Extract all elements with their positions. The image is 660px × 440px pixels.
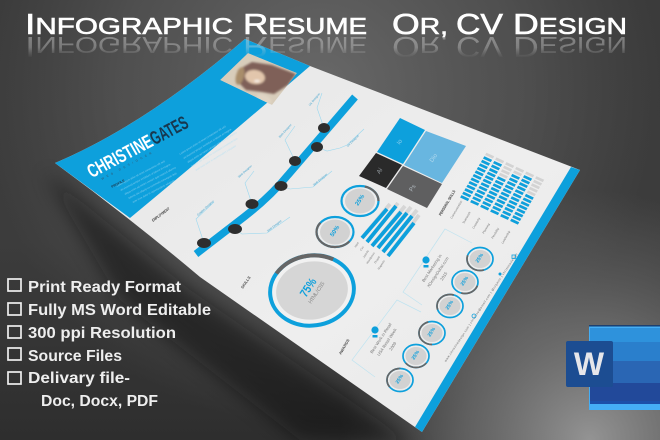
profile label: PROFILE: [111, 178, 126, 189]
profile text: left column: aute irure dolor in reprehenderit voluptate: [132, 178, 176, 204]
matrix: gray tracks: [464, 154, 540, 223]
matrix: blue levels: [464, 158, 530, 223]
badge 3: 25%: [445, 299, 455, 311]
badge 3: [437, 294, 463, 318]
profile text: left column: [116, 159, 178, 204]
item: resolution: 300 ppi Resolution: [28, 325, 176, 342]
bar labels: Css: [359, 245, 365, 252]
profile text: right column: Lorem ipsum dolor sit amet consectetur elit sed: [178, 124, 227, 156]
profile text: left column: aliqua enim ad minim veniam quis nostrud ullamco: [124, 165, 177, 196]
quadrant: blue square: [377, 118, 425, 164]
title reflection: RESUME: [243, 30, 367, 62]
ring caption: HTML / CSS: [308, 281, 327, 305]
skill ring: 25%: [342, 186, 378, 216]
name: Christine Gates: GATES: [147, 113, 192, 150]
award text: Best Marketing in: [421, 253, 443, 283]
badge 4: 25%: [427, 326, 437, 338]
item: print ready: Print Ready Format: [28, 279, 181, 296]
employment label: EMPLOYMENT: [151, 206, 171, 223]
quadrant: gray square: [387, 166, 442, 208]
icon: MS Word: [566, 325, 660, 410]
skill ring: 25%: 25%: [355, 193, 367, 207]
timeline band: [196, 97, 355, 254]
title: INFOGRAPHIC: [25, 9, 233, 41]
skill ring: 50%: 50%: [330, 224, 342, 238]
quadrant: labels: [376, 138, 440, 193]
quadrant: labels: Ps: [409, 184, 418, 193]
timeline labels: UX Designer: [308, 92, 321, 107]
timeline labels: Web Designer: [312, 172, 328, 187]
timeline labels: Web Designer: [278, 123, 293, 139]
skill ring: 75% html css: [266, 250, 358, 331]
timeline connectors: [196, 93, 364, 243]
personal skills heading: PERSONAL SKILLS: [438, 189, 456, 217]
award text: USA Retail Week: [376, 327, 398, 357]
profile text: left column: do eiusmod tempor incididunt ut labore et magna: [120, 162, 172, 192]
award box: marketing: [403, 229, 472, 305]
title: DESIGN: [513, 9, 627, 41]
matrix: row labels: Leadership: [500, 229, 511, 245]
skill ring: 50%: [316, 217, 354, 247]
bar labels: Drupal: [373, 255, 381, 264]
profile text: right column: laboris nisi aliquip ex commodo consequat duis: [190, 136, 239, 168]
badge 2: [452, 270, 478, 294]
title reflection: OR,: [392, 30, 448, 62]
bar labels: Joomla: [362, 249, 370, 259]
timeline labels: Web Designer: [266, 219, 283, 233]
award text: Best Work in Retail: [369, 322, 393, 354]
bar labels: Html: [353, 241, 360, 248]
item: formats: Doc, Docx, PDF: [41, 393, 158, 410]
resume sheet: [55, 39, 580, 432]
profile text: left column: Lorem ipsum dolor sit amet consectetur elit sed: [116, 159, 166, 188]
title: CV: [456, 9, 504, 41]
sheet: blue header: [55, 39, 310, 218]
paper shadow: [45, 172, 425, 440]
profile text: right column: do eiusmod tempor incididunt ut labore et magna: [182, 127, 232, 160]
timeline nodes: [197, 123, 330, 248]
contact line: www.christinedesign.com | christine@email.com | @organic | christinedesign: [443, 252, 519, 363]
sheet: blue right bar: [415, 167, 580, 432]
item: source files: Source Files: [28, 348, 122, 365]
title: OR,: [392, 9, 448, 41]
bar labels: Wordpress: [365, 251, 376, 265]
title reflection: CV: [456, 30, 504, 62]
profile text: right column: aliqua enim ad minim veniam quis nostrud ullamco: [186, 130, 238, 164]
matrix: row labels: Flexibility: [490, 226, 500, 240]
word W tile: W: [574, 346, 605, 382]
timeline labels: UX Designer: [346, 134, 360, 148]
badge 4: [419, 322, 445, 344]
award text: 2009: [388, 340, 398, 351]
item: word editable: Fully MS Word Editable: [28, 302, 211, 319]
timeline labels: Web Designer: [237, 164, 253, 179]
job title: WEB DESIGNER: [101, 150, 155, 181]
quadrant: labels: Io: [396, 138, 404, 146]
bar tracks: [362, 203, 419, 256]
title: RESUME: [243, 9, 367, 41]
item: delivery file: Delivary file-: [28, 370, 130, 387]
award box: retail: [352, 300, 421, 377]
award icon: [371, 326, 379, 338]
ring value: 75%: [297, 275, 320, 300]
matrix: row labels: Communication: [449, 199, 463, 220]
badge 5: 25%: [411, 349, 421, 361]
badge 5: [403, 344, 429, 368]
portrait photo: [220, 53, 297, 106]
matrix: row labels: [449, 199, 511, 245]
award badges: [387, 248, 493, 392]
badge 2: 25%: [460, 275, 470, 287]
quadrant: labels: Dio: [429, 152, 440, 164]
personal skills matrix: [438, 154, 540, 245]
bar levels: [362, 206, 414, 256]
title reflection: [25, 30, 627, 62]
checkbox icons: [8, 279, 21, 384]
word document stack: [589, 325, 660, 410]
bar labels: [353, 241, 386, 271]
matrix: row labels: Teamwork: [461, 210, 472, 225]
profile text: left column: laboris nisi aliquip ex commodo consequat duis: [128, 171, 178, 200]
matrix: row labels: Creativity: [471, 216, 481, 230]
title reflection: INFOGRAPHIC: [25, 30, 233, 62]
timeline labels: Graphic Designer: [196, 199, 215, 217]
profile text: right column: [178, 124, 239, 172]
matrix: row labels: Planning: [481, 222, 491, 235]
awards label: AWARDS: [338, 338, 351, 356]
personality quadrant: [359, 118, 466, 208]
badge 1: 25%: [475, 252, 485, 264]
badge 6: 25%: [395, 373, 405, 385]
software bar chart: [353, 203, 419, 271]
badge 1: [467, 248, 493, 270]
award text: XDesignDubai.com: [426, 255, 450, 288]
name: Christine Gates: CHRISTINE: [84, 131, 157, 183]
title: [25, 9, 627, 41]
title reflection: DESIGN: [513, 30, 627, 62]
feature checklist: [8, 279, 211, 410]
quadrant: labels: Ai: [376, 168, 384, 175]
quadrant: black square: [359, 153, 402, 188]
sheet: white page: [55, 39, 580, 432]
skills label: SKILLS: [240, 275, 252, 290]
bar labels: Magento: [377, 259, 386, 271]
badge 6: [387, 368, 413, 392]
employment timeline: [196, 92, 364, 254]
timeline labels: [196, 92, 360, 233]
award icon: [422, 256, 430, 268]
profile text: right column: aute irure dolor in reprehenderit voluptate: [194, 144, 237, 172]
quadrant: light blue square: [404, 131, 466, 183]
award text: 2015: [439, 270, 449, 281]
